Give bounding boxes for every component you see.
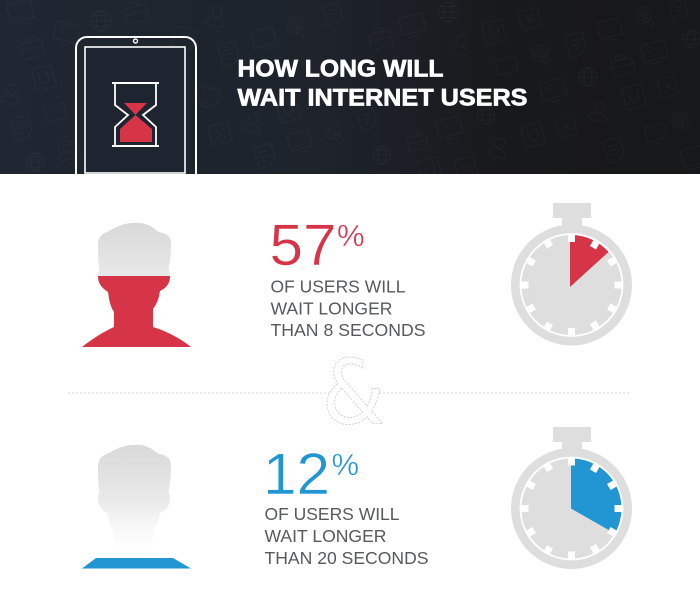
panel: 12 percent row — [82, 427, 632, 569]
text: wait longer than 20 seconds: WAIT LONGER — [264, 526, 386, 546]
header band — [0, 0, 700, 183]
big number 57% — [270, 213, 365, 278]
icon: stopwatch with red 8-second wedge — [511, 203, 632, 346]
icon: stopwatch with blue 20-second wedge — [511, 427, 632, 569]
big number 57%: 57 — [270, 213, 336, 278]
icon: tablet with hourglass — [76, 37, 196, 175]
icon: hourglass — [112, 83, 159, 146]
ampersand outline: & — [322, 340, 385, 444]
text: wait longer than 8 seconds — [270, 276, 426, 340]
title: HOW LONG WILL — [238, 56, 444, 82]
big number 57%: % — [337, 218, 365, 253]
big number 12%: 12 — [263, 442, 330, 507]
text: wait longer than 20 seconds: THAN 20 SECONDS — [264, 548, 428, 568]
panel: 57 percent row — [82, 203, 632, 347]
text: wait longer than 8 seconds: WAIT LONGER — [270, 298, 392, 318]
big number 12% — [263, 442, 359, 507]
text: wait longer than 20 seconds — [264, 504, 428, 568]
background icon pattern — [0, 0, 700, 183]
icon: person with red fill — [82, 223, 191, 347]
title — [238, 56, 528, 112]
text: wait longer than 8 seconds: THAN 8 SECONDS — [270, 320, 426, 340]
text: wait longer than 20 seconds: OF USERS WILL — [264, 504, 400, 524]
big number 12%: % — [332, 447, 359, 482]
title: WAIT INTERNET USERS — [238, 84, 528, 112]
text: wait longer than 8 seconds: OF USERS WILL — [270, 276, 406, 296]
icon: person with blue base — [82, 445, 191, 568]
